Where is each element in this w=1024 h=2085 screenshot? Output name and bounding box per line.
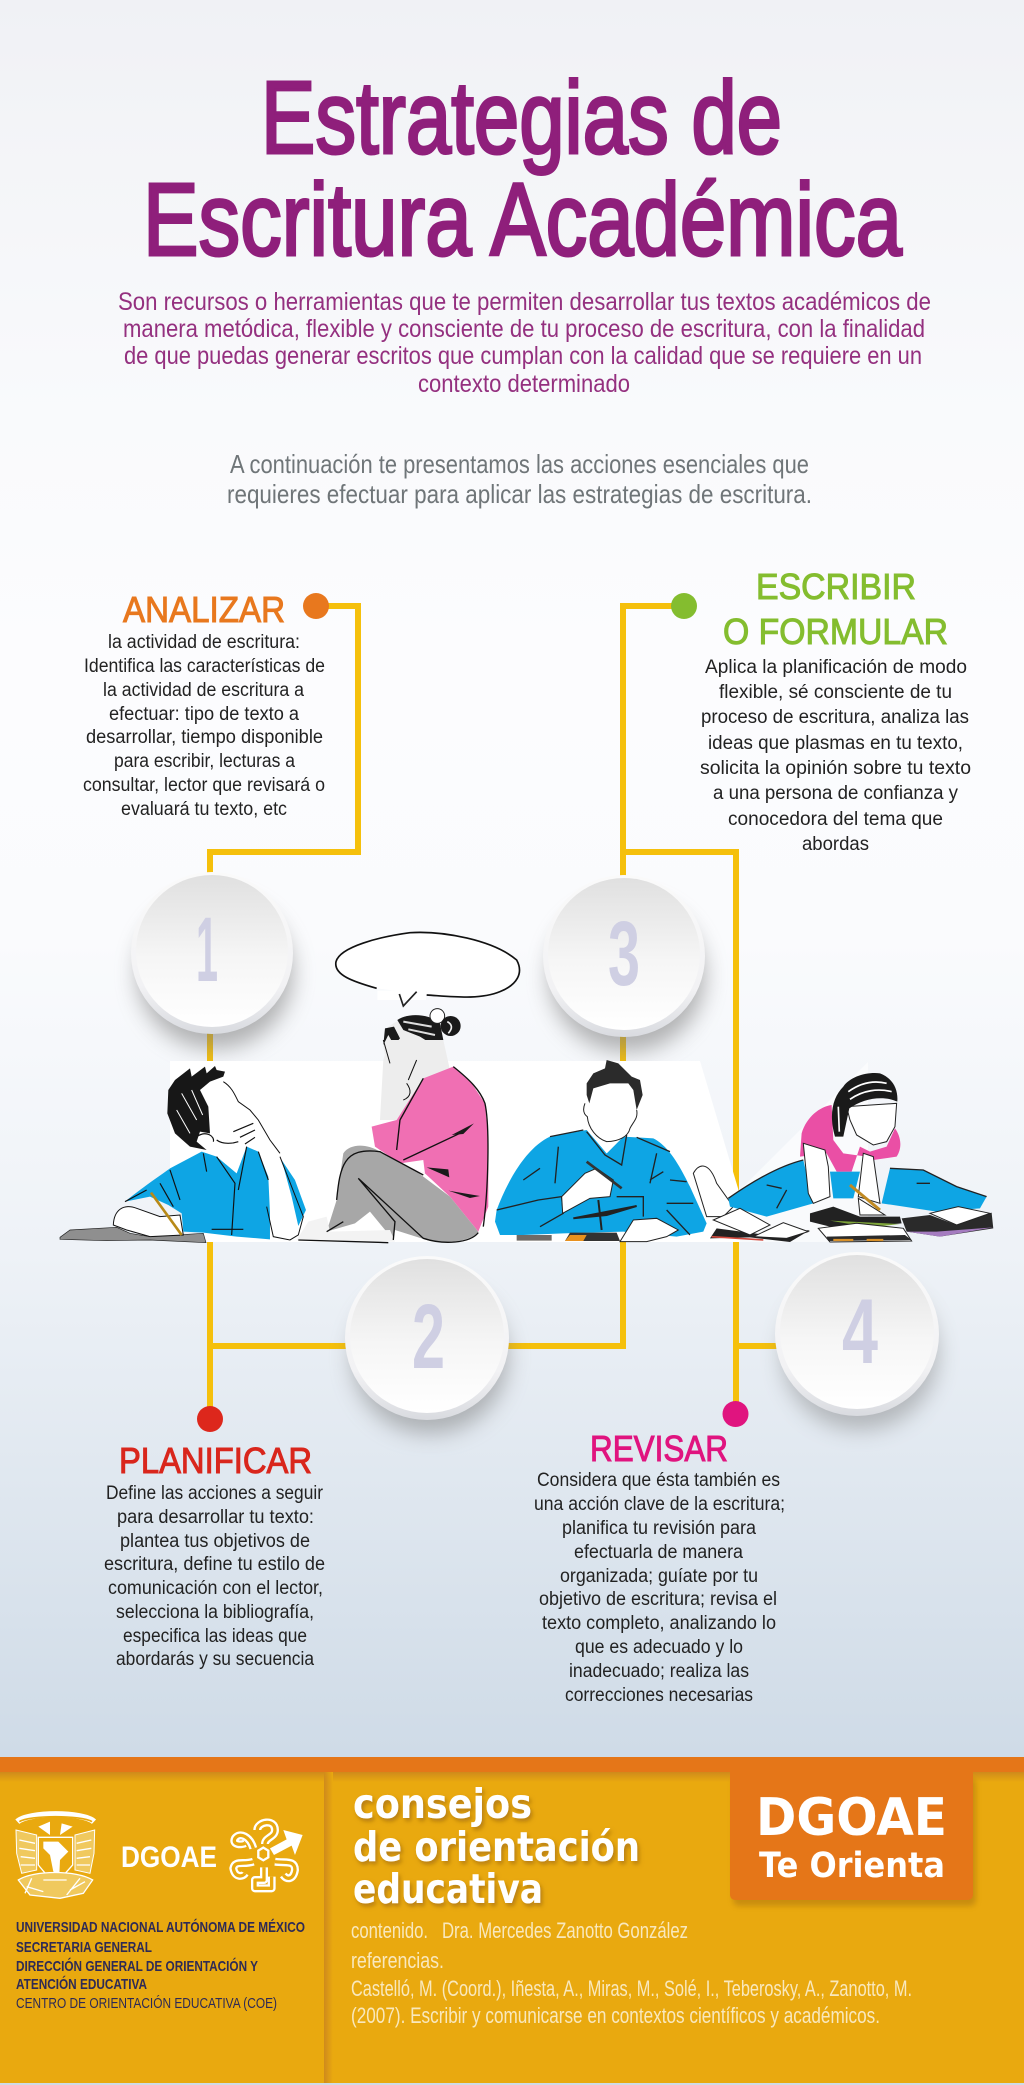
description: ideas que plasmas en tu texto, — [708, 733, 963, 754]
description: texto completo, analizando lo — [542, 1613, 776, 1634]
logo: UNAM seal — [16, 1814, 95, 1898]
footer top band — [0, 1757, 1024, 1772]
description: organizada; guíate por tu — [560, 1566, 758, 1587]
dot: orange — [303, 593, 329, 619]
description: solicita la opinión sobre tu texto — [700, 758, 971, 779]
number circle 2: 2 — [412, 1286, 445, 1388]
description — [700, 657, 971, 855]
institution names: UNIVERSIDAD NACIONAL AUTÓNOMA DE MÉXICO — [16, 1918, 305, 1936]
description: la actividad de escritura a — [103, 680, 304, 701]
number circle 3: 3 — [608, 903, 640, 1005]
number circle 1 — [131, 872, 293, 1049]
description: comunicación con el lector, — [108, 1578, 323, 1599]
description: proceso de escritura, analiza las — [701, 707, 969, 728]
figure: man looking up — [60, 1066, 306, 1243]
intro paragraph — [118, 288, 931, 398]
description: a una persona de confianza y — [713, 783, 958, 804]
description: consultar, lector que revisará o — [83, 775, 325, 796]
description: para desarrollar tu texto: — [117, 1507, 314, 1528]
number circle 2 — [345, 1256, 509, 1434]
description: una acción clave de la escritura; — [534, 1494, 785, 1515]
step 1: analizar — [83, 589, 329, 820]
description: Identifica las características de — [84, 656, 325, 677]
dot: red — [197, 1406, 223, 1432]
speech bubble — [336, 932, 519, 1006]
description: especifica las ideas que — [123, 1626, 307, 1647]
figure: woman lying with books — [693, 1073, 993, 1242]
heading: PLANIFICAR — [119, 1440, 312, 1481]
orange badge: DGOAE — [756, 1788, 947, 1848]
footer divider — [324, 1772, 333, 2083]
description — [534, 1470, 785, 1706]
illustration: students writing — [60, 932, 993, 1243]
description: planifica tu revisión para — [562, 1518, 756, 1539]
figure: woman thinking — [297, 1009, 488, 1243]
footer — [0, 1757, 1024, 2083]
description: la actividad de escritura: — [108, 632, 300, 653]
dot: green — [671, 593, 697, 619]
logo: DGOAE wordmark: DGOAE — [121, 1841, 217, 1874]
lead-in text: A continuación te presentamos las acciones esenciales que — [230, 449, 809, 479]
description: evaluará tu texto, etc — [121, 799, 287, 820]
step 2: planificar — [104, 1406, 325, 1670]
description: conocedora del tema que — [728, 809, 943, 830]
dot: magenta — [722, 1401, 748, 1427]
white backdrop — [170, 1061, 913, 1242]
heading: ESCRIBIR — [756, 566, 916, 607]
description: para escribir, lecturas a — [114, 751, 295, 772]
description: Aplica la planificación de modo — [705, 657, 967, 678]
title — [143, 60, 903, 277]
institution names: CENTRO DE ORIENTACIÓN EDUCATIVA (COE) — [16, 1995, 277, 2012]
description — [104, 1483, 325, 1670]
description: Define las acciones a seguir — [106, 1483, 324, 1504]
heading: ANALIZAR — [123, 589, 285, 630]
figure: man with pen — [495, 1060, 707, 1242]
intro paragraph: contexto determinado — [418, 370, 630, 398]
orange badge: Te Orienta — [759, 1846, 945, 1886]
credits and references: (2007). Escribir y comunicarse en contextos científicos y académicos. — [351, 2003, 880, 2028]
description: escritura, define tu estilo de — [104, 1554, 325, 1575]
description — [83, 632, 325, 820]
footer heading: consejos — [353, 1780, 532, 1828]
footer heading — [353, 1780, 640, 1913]
footer top shadow — [0, 1772, 1024, 1782]
intro paragraph: Son recursos o herramientas que te permiten desarrollar tus textos académicos de — [118, 288, 931, 316]
description: abordas — [802, 834, 869, 855]
description: inadecuado; realiza las — [569, 1661, 749, 1682]
description: efectuarla de manera — [574, 1542, 743, 1563]
step 4: revisar — [534, 1401, 785, 1706]
credits and references — [351, 1918, 912, 2028]
number circle 4: 4 — [842, 1281, 878, 1383]
footer heading: de orientación — [353, 1823, 640, 1871]
description: abordarás y su secuencia — [116, 1649, 314, 1670]
step 3: escribir o formular — [671, 566, 971, 855]
footer heading: educativa — [353, 1865, 543, 1913]
lead-in text: requieres efectuar para aplicar las estrategias de escritura. — [227, 479, 812, 509]
institution names: ATENCIÓN EDUCATIVA — [16, 1975, 147, 1993]
description: desarrollar, tiempo disponible — [86, 727, 323, 748]
footer background — [0, 1771, 1024, 2083]
institution names: SECRETARIA GENERAL — [16, 1939, 152, 1956]
description: selecciona la bibliografía, — [116, 1602, 314, 1623]
connector lines — [210, 606, 860, 1419]
heading — [723, 566, 948, 652]
description: Considera que ésta también es — [537, 1470, 780, 1491]
description: correcciones necesarias — [565, 1685, 753, 1706]
intro paragraph: de que puedas generar escritos que cumplan con la calidad que se requiere en un — [124, 342, 922, 370]
description: objetivo de escritura; revisa el — [539, 1589, 777, 1610]
description: que es adecuado y lo — [575, 1637, 743, 1658]
intro paragraph: manera metódica, flexible y consciente de tu proceso de escritura, con la finalidad — [123, 315, 925, 343]
description: efectuar: tipo de texto a — [109, 704, 299, 725]
credits and references: contenido. Dra. Mercedes Zanotto González — [351, 1918, 688, 1943]
title: Estrategias de — [261, 60, 782, 175]
lead-in text — [227, 449, 812, 509]
orange badge — [730, 1772, 976, 1906]
number circle 3 — [543, 875, 705, 1052]
logo: DGOAE symbol — [233, 1822, 303, 1888]
description: flexible, sé consciente de tu — [719, 682, 952, 703]
number circle 1: 1 — [196, 899, 218, 1001]
institution names: DIRECCIÓN GENERAL DE ORIENTACIÓN Y — [16, 1957, 258, 1975]
heading: REVISAR — [590, 1428, 728, 1469]
description: plantea tus objetivos de — [120, 1531, 310, 1552]
institution names — [16, 1918, 305, 2012]
number circle 4 — [775, 1252, 939, 1430]
credits and references: referencias. — [351, 1948, 444, 1973]
heading: O FORMULAR — [723, 611, 948, 652]
